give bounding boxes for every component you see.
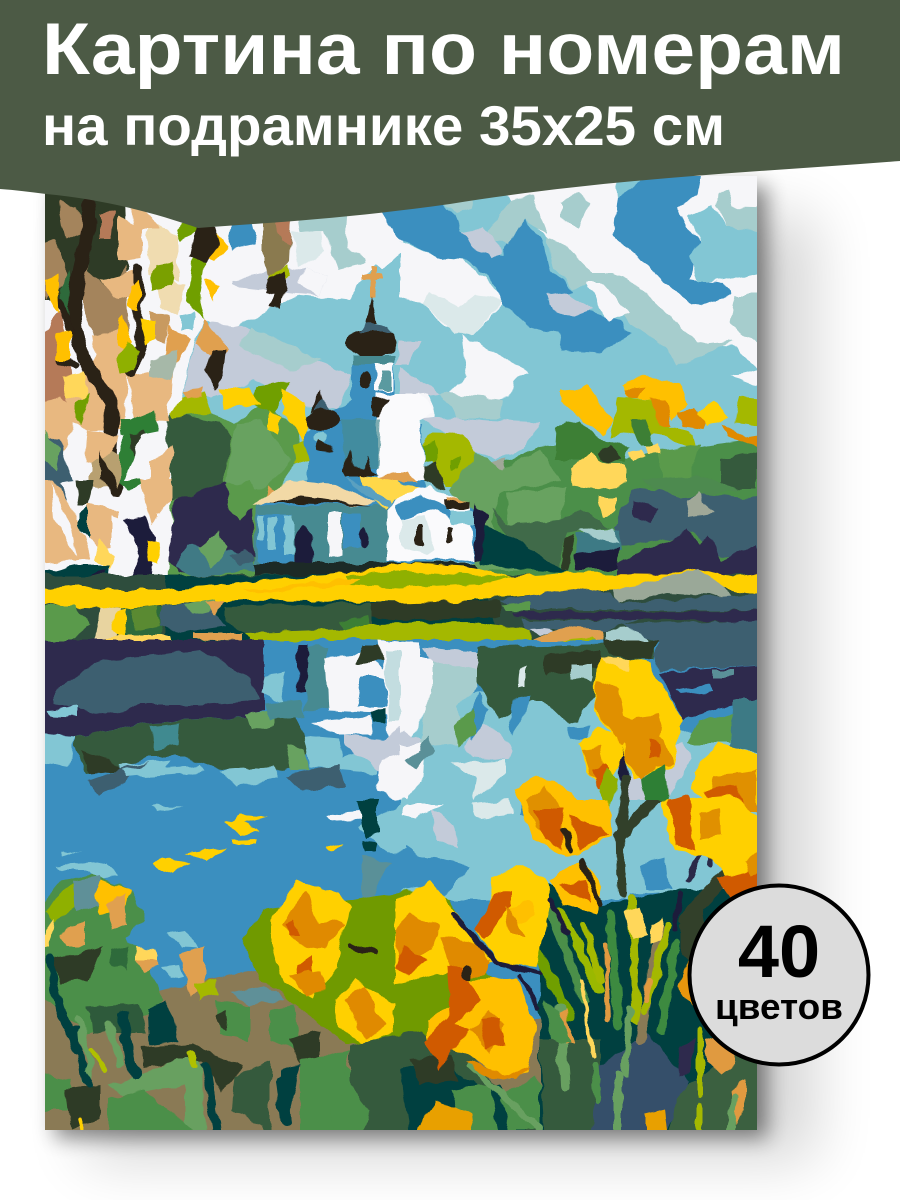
shore and meadow (45, 562, 757, 642)
trees behind the church, left (155, 380, 310, 577)
birch trees, left (45, 194, 293, 578)
title: Картина по номерам (42, 9, 845, 90)
header banner (0, 0, 900, 228)
yellow irises (272, 657, 770, 1135)
foreground foliage (30, 735, 770, 1140)
canvas shadow (55, 186, 815, 1160)
subtitle: на подрамнике 35х25 см (42, 94, 725, 157)
sky (182, 176, 757, 565)
badge: 40 colours (690, 886, 868, 1064)
painting: church by the lake (30, 160, 770, 1140)
trees, right (420, 377, 770, 580)
iris stems (453, 913, 540, 973)
lake (30, 620, 770, 1020)
badge: 40 colours: 40 (738, 910, 820, 993)
badge: 40 colours: цветов (715, 986, 843, 1027)
church (252, 268, 487, 575)
